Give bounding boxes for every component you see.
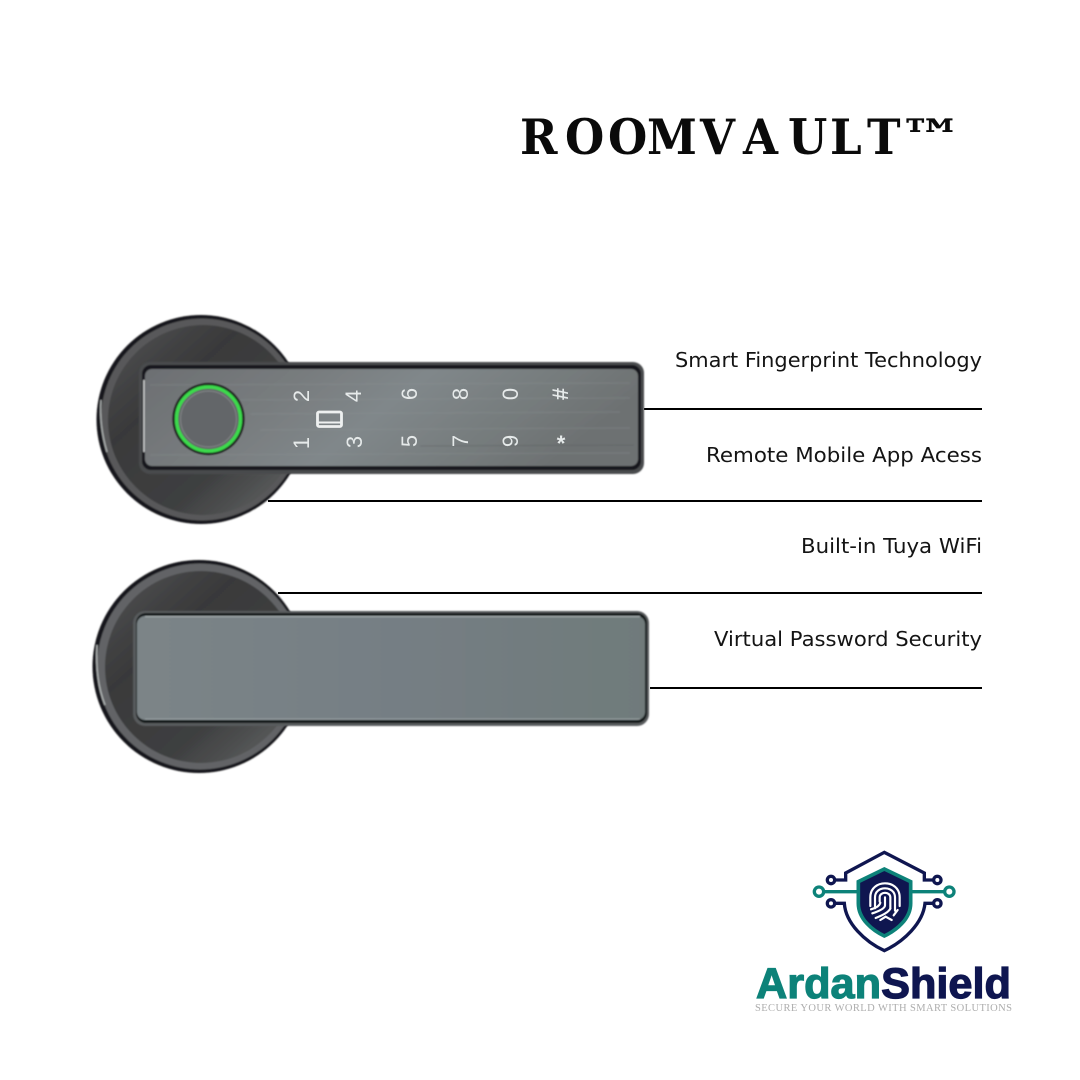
keypad digits: 6 (397, 388, 422, 400)
keypad digits: # (548, 388, 573, 400)
keypad digits: 2 (289, 390, 314, 402)
callout lines (268, 409, 982, 688)
fingerprint sensor with green ring (172, 383, 244, 455)
logo: ArdanShield (755, 852, 1012, 1014)
feature label: Built-in Tuya WiFi: Built-in Tuya WiFi (801, 534, 982, 558)
title: ™ (899, 109, 963, 166)
keypad digits: 4 (341, 390, 366, 402)
bottom door lock, back view (92, 560, 649, 773)
keypad digits: 8 (448, 388, 473, 400)
feature label: Virtual Password Security: Virtual Password Security (714, 627, 982, 651)
title: ROOMVAULT (520, 109, 901, 166)
keypad digits: 3 (342, 436, 367, 448)
keypad handle (139, 362, 644, 474)
feature label: Smart Fingerprint Technology: Smart Fingerprint Technology (675, 348, 982, 372)
feature label: Remote Mobile App Acess: Remote Mobile App Acess (706, 443, 982, 467)
icon: card slot (318, 412, 342, 426)
icon: circuit shield with fingerprint (814, 852, 954, 951)
lock rosette disc (96, 315, 306, 524)
keypad digits (289, 388, 573, 456)
keypad digits: 1 (289, 437, 314, 449)
logo tagline: SECURE YOUR WORLD WITH SMART SOLUTIONS (755, 1003, 1012, 1014)
logo wordmark: ArdanShield (756, 960, 1011, 1008)
keypad digits: 9 (498, 435, 523, 447)
keypad digits: 5 (397, 435, 422, 447)
keypad digits: 7 (448, 435, 473, 447)
plain handle (133, 611, 649, 726)
lock rosette disc (92, 560, 306, 773)
keypad digits: * (557, 431, 566, 456)
keypad digits: 0 (498, 388, 523, 400)
top door lock with keypad (96, 315, 644, 524)
